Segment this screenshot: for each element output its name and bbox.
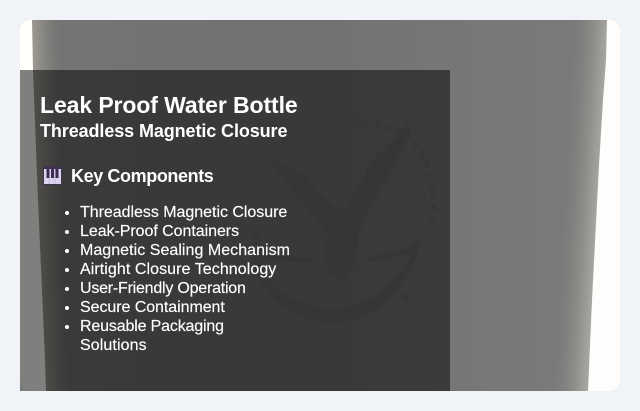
key components list: Secure Containment bbox=[80, 299, 225, 316]
dark text panel bbox=[20, 70, 450, 391]
embossed logo bbox=[250, 123, 422, 322]
subtitle: Threadless Magnetic Closure bbox=[40, 121, 287, 141]
key components list: Solutions bbox=[80, 337, 147, 354]
icon: piano keyboard bbox=[43, 166, 62, 185]
key components list: Threadless Magnetic Closure bbox=[80, 204, 287, 221]
key components list: User-Friendly Operation bbox=[80, 280, 246, 297]
title: Leak Proof Water Bottle bbox=[40, 92, 298, 118]
key components list: Airtight Closure Technology bbox=[80, 261, 276, 278]
key components list: Leak-Proof Containers bbox=[80, 223, 239, 240]
key components list: Magnetic Sealing Mechanism bbox=[80, 242, 290, 259]
key components list: Reusable Packaging bbox=[80, 318, 224, 335]
key components list bbox=[65, 204, 290, 354]
section heading: key components: Key Components bbox=[71, 166, 213, 186]
